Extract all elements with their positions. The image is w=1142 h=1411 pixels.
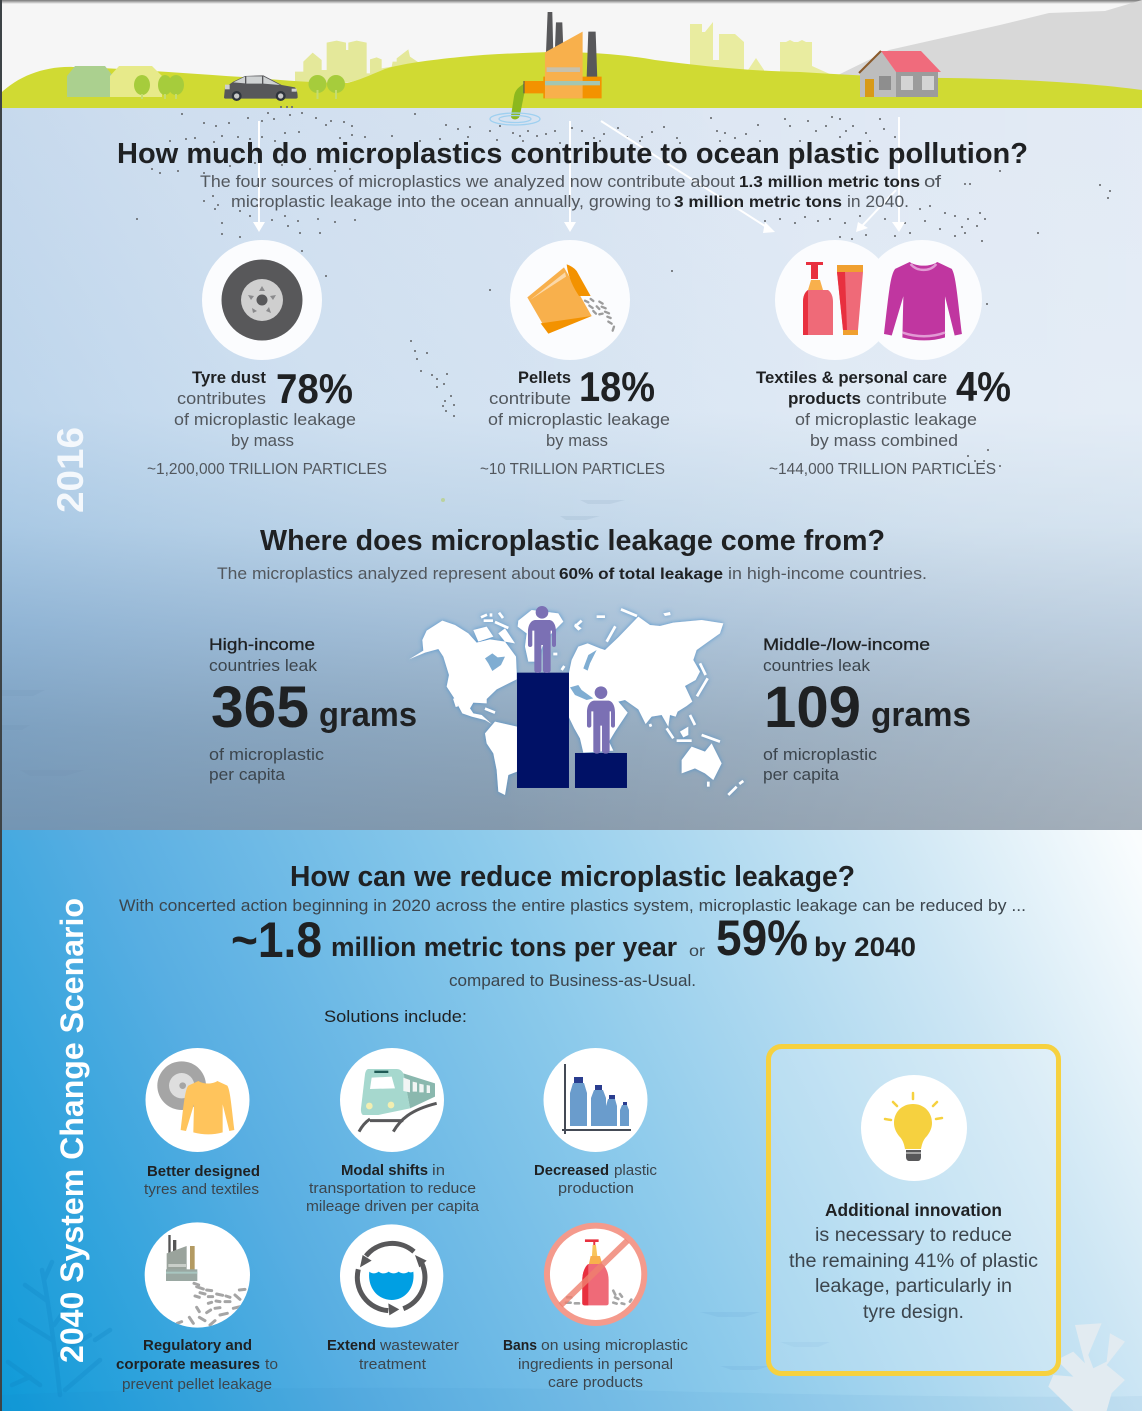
key figures: million metric tons per year [331,932,677,962]
icon: car [224,75,298,101]
caption: treatment [359,1356,427,1373]
caption: mileage driven per capita [306,1198,480,1215]
text block: high-income: 365 [211,675,309,740]
text block: intro: microplastic leakage into the ocean annually, growing to [231,192,671,211]
stat: tyre dust: ~1,200,000 TRILLION PARTICLES [147,461,387,478]
stat: tyre dust: 78% [276,365,353,412]
text block: middle/low-income [763,635,971,784]
solution: wastewater treatment [327,1224,459,1373]
text block: middle/low-income: per capita [763,765,840,784]
stat: pellets: contribute [489,389,571,408]
tube [837,265,863,335]
text block: high-income: countries leak [209,656,318,675]
heading: reduce leakage: How can we reduce microplastic leakage? [290,861,855,893]
stat: tyre dust: of microplastic leakage [174,410,356,429]
solution: better designed [144,1048,260,1198]
stat: pellets [480,363,670,478]
icon: textiles and personal care [775,240,982,360]
particle near text [441,498,445,502]
caption: transportation to reduce [309,1180,476,1197]
panel: 2016 ocean background [0,108,1142,830]
text block: leakage intro [217,564,927,583]
microplastic particles scatter [137,106,1110,467]
caption [534,1162,657,1197]
stat: pellets: by mass [546,431,608,450]
caption: Regulatory and [143,1337,252,1354]
text block: high-income: per capita [209,765,286,784]
caption: Bans [503,1337,537,1354]
caption: Decreased [534,1162,609,1179]
key figures [231,910,916,968]
bottle [803,262,833,335]
stat: pellets: 18% [579,363,655,410]
icon: bottle chart [544,1048,648,1152]
text block: middle/low-income: grams [871,696,971,734]
icon: faint coral left [8,1262,110,1395]
stat: textiles and personal care: Textiles & personal care [756,369,947,387]
text block: high-income: High-income [209,635,315,654]
panel: 2040 background [0,830,1142,1411]
caption: Modal shifts [341,1162,428,1179]
caption: ingredients in personal [518,1356,673,1373]
icon: trees [134,75,345,99]
text block: leakage intro: 60% of total leakage [559,566,723,583]
caption [144,1163,260,1198]
stat: tyre dust: Tyre dust [192,369,267,387]
text block: middle/low-income: countries leak [763,656,871,675]
icon: tyre and shirt [146,1048,250,1152]
caption: tyres and textiles [144,1181,259,1198]
key figures: 59% [716,910,808,966]
solution: decreased production [534,1048,657,1197]
arrow: textiles [601,121,775,233]
caption: in [432,1162,445,1179]
text block: high-income [209,635,417,784]
caption: wastewater [379,1337,459,1354]
icon: train [340,1048,444,1152]
icon: pellet bucket [510,240,630,360]
text block: middle/low-income: 109 [764,675,861,740]
caption: prevent pellet leakage [122,1376,272,1393]
stat: textiles and personal care: products [788,390,861,408]
text block: leakage intro: The microplastics analyzed represent about [217,564,555,583]
city silhouettes [295,41,420,83]
icon: house [859,51,941,97]
year label: 2016: 2016 [50,427,91,513]
caption: to [265,1356,278,1373]
text block: high-income: grams [319,696,417,734]
text block: intro: in 2040. [847,192,909,211]
text block: intro: of [924,172,941,191]
text block: compared: compared to Business-as-Usual. [449,971,696,990]
caption: on using microplastic [541,1337,689,1354]
hills [0,52,1142,108]
left page edge [0,0,2,1411]
bar: high-income [517,673,569,788]
icon: faint coral right [1048,1323,1125,1411]
caption [116,1337,278,1393]
arrows: sources to categories [253,117,905,233]
sweater [884,262,962,340]
caption: plastic [614,1162,657,1179]
arrow: pellets [564,121,576,232]
text block: reduce intro: With concerted action beginning in 2020 across the entire plastics system, microplastic leakage can be reduced by ... [119,896,1026,915]
arrow: personal care [856,190,896,232]
stat: tyre dust [147,365,387,478]
icon: factory [511,12,602,119]
year label: 2040 System Change Scenario: 2040 System Change Scenario [54,898,90,1363]
sky [0,0,1142,108]
icon: water cycle [340,1224,443,1328]
stat: tyre dust: by mass [231,431,294,450]
caption: Extend [327,1337,376,1354]
callout text: tyre design. [863,1302,964,1323]
key figures: ~1.8 [231,912,322,968]
arrow: personal care 2 [892,117,905,232]
caption: care products [548,1374,643,1391]
caption [327,1337,459,1373]
icon: person middle/low-income [587,686,615,754]
text block: middle/low-income: of microplastic [763,745,878,764]
text block: solutions include: Solutions include: [324,1007,467,1026]
solution: regulatory measures [116,1222,278,1393]
callout: additional innovation [768,1046,1058,1374]
caption: corporate measures [116,1356,260,1373]
world map [409,606,743,795]
icon: left houses [67,66,162,97]
stat: textiles and personal care [756,363,1011,478]
text block: intro [200,172,941,211]
key figures: by 2040 [814,932,916,962]
text block: high-income: of microplastic [209,745,325,764]
text block: intro: The four sources of microplastics we analyzed now contribute about [200,172,735,191]
icon: factory and pellets [145,1222,250,1328]
panel: land scene [0,0,1142,125]
stat: textiles and personal care: contribute [866,389,947,408]
stat: tyre dust: contributes [177,389,266,408]
callout text: leakage, particularly in [815,1276,1012,1297]
callout text [789,1200,1038,1323]
caption [503,1337,689,1391]
caption [306,1162,480,1215]
text block: middle/low-income: Middle-/low-income [763,635,930,654]
stat: textiles and personal care: 4% [956,363,1011,410]
heading: leakage source: Where does microplastic leakage come from? [260,525,885,557]
icon: ripple of pollution [490,113,540,125]
icon: light bulb [861,1075,967,1181]
stat: pellets: Pellets [518,369,571,387]
caption: production [558,1180,634,1197]
grey mountain [838,0,1142,90]
stat: textiles and personal care: of microplastic leakage [795,410,977,429]
callout text: is necessary to reduce [815,1225,1012,1246]
caption: Better designed [147,1163,260,1180]
icon: tyre [202,240,322,360]
callout text: Additional innovation [825,1200,1002,1220]
text block: leakage intro: in high-income countries. [728,564,927,583]
text block: intro: 1.3 million metric tons [739,174,920,191]
stat: pellets: of microplastic leakage [488,410,670,429]
stat: pellets: ~10 TRILLION PARTICLES [480,461,665,478]
key figures: or [689,943,706,960]
solution: bans [503,1224,689,1391]
icon: person high-income [528,606,556,673]
icon: banned bottle [546,1224,646,1324]
stat: textiles and personal care: by mass combined [810,431,958,450]
arrow: tyre dust [253,121,265,232]
stat: textiles and personal care: ~144,000 TRILLION PARTICLES [769,461,996,478]
text block: intro: 3 million metric tons [674,194,842,211]
callout text: the remaining 41% of plastic [789,1251,1038,1272]
bar: middle/low-income [575,753,627,788]
heading: microplastics contribution: How much do microplastics contribute to ocean plastic pollution? [117,138,1028,170]
solution: modal shifts [306,1048,480,1215]
